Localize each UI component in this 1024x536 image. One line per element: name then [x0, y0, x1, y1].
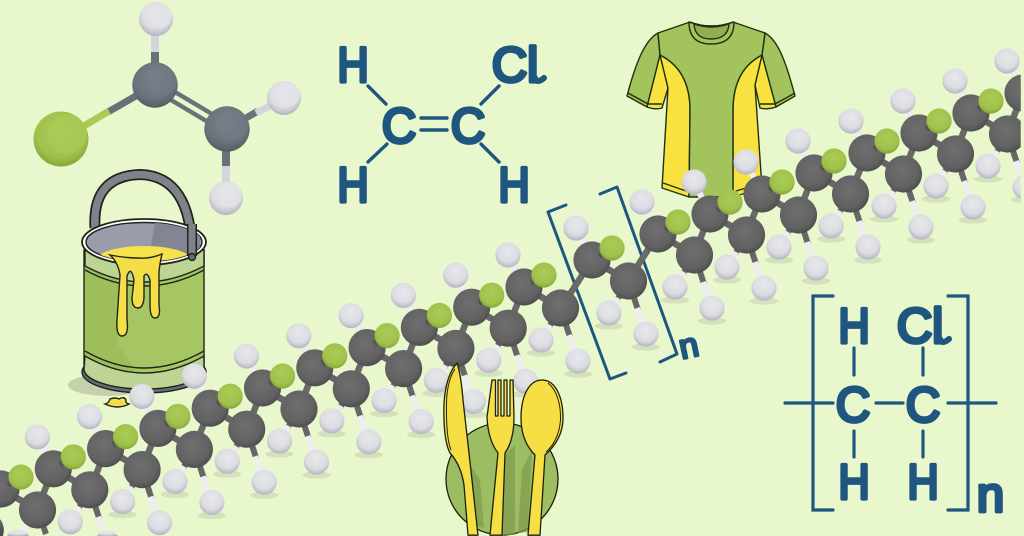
can handle [95, 174, 192, 256]
vinyl chloride molecule model [34, 2, 301, 215]
green plate [446, 423, 558, 535]
collar [689, 22, 734, 44]
left sleeve [627, 33, 660, 107]
structural formula: PVC repeat unit: C [906, 378, 940, 433]
hydrogen atom right [267, 81, 301, 115]
right bracket [600, 187, 677, 362]
right side panel [733, 55, 762, 197]
hydrogen atom top [139, 2, 173, 36]
hems [628, 93, 795, 192]
chain repeat-unit bracket [548, 187, 677, 379]
repeat unit [129, 384, 226, 519]
cutlery [444, 363, 563, 535]
structural formula: vinyl chloride: C [451, 99, 485, 154]
repeat unit [733, 149, 830, 285]
t-shirt [627, 22, 795, 197]
structural formula: PVC repeat unit: Cl [897, 300, 943, 354]
can shadow [68, 374, 148, 396]
repeat unit [838, 108, 935, 244]
repeat unit [681, 169, 778, 305]
paint surface [100, 246, 187, 261]
right sleeve [762, 33, 795, 107]
can body [84, 250, 204, 389]
structural formula: PVC repeat unit: H [907, 454, 939, 509]
handle front [187, 224, 197, 256]
repeat unit [942, 68, 1024, 204]
repeat unit [182, 364, 278, 499]
partial carbon at bottom-left corner [0, 519, 4, 536]
can rim [82, 219, 206, 265]
can base ring [82, 351, 206, 393]
knife [444, 363, 478, 535]
chlorine atom [34, 112, 88, 166]
left bracket [548, 205, 626, 379]
structural formula: PVC repeat unit: C [836, 378, 870, 433]
repeat unit in bracket [563, 215, 660, 351]
repeat unit [495, 242, 592, 378]
repeat unit [286, 323, 383, 458]
structural formula: vinyl chloride: C [382, 99, 416, 154]
spoon [521, 380, 563, 535]
paint can [68, 174, 206, 407]
paint puddle [105, 398, 129, 407]
repeat unit [391, 283, 487, 418]
repeat unit [338, 303, 435, 438]
centre panel [658, 22, 765, 197]
hydrogen atom bottom [209, 181, 243, 215]
structural formula: vinyl chloride: Cl [492, 38, 538, 92]
structural formula: PVC repeat unit: H [838, 298, 870, 353]
can lower band [84, 356, 204, 389]
repeat unit [890, 88, 987, 224]
repeat unit [785, 128, 882, 264]
structural formula: PVC repeat unit [785, 296, 1004, 522]
carbon atom 1 [132, 62, 178, 108]
structural formula: PVC repeat unit: n [977, 468, 1004, 522]
structural formula: vinyl chloride: H [498, 157, 530, 212]
repeat unit cut by bottom edge [25, 424, 118, 536]
backbone bonds [40, 92, 1021, 494]
carbon atom 2 [204, 106, 250, 152]
repeat unit [994, 48, 1021, 112]
repeat unit [629, 189, 726, 325]
repeat unit cut by bottom edge [0, 464, 56, 536]
paint drips [110, 254, 162, 336]
structural formula: vinyl chloride [337, 37, 544, 212]
repeat unit [234, 343, 330, 479]
can upper band [85, 250, 204, 282]
repeat unit [443, 263, 540, 398]
fork [487, 380, 514, 535]
structural formula: vinyl chloride: H [337, 37, 369, 92]
left side panel [660, 55, 690, 197]
structural formula: PVC repeat unit: H [838, 454, 870, 509]
right sleeve underside [755, 55, 776, 109]
structural formula: vinyl chloride: H [337, 157, 369, 212]
repeat unit near bottom edge [77, 404, 172, 535]
plate shading [470, 445, 532, 535]
left sleeve underside [647, 55, 668, 109]
bracket subscript n: n [676, 326, 702, 367]
